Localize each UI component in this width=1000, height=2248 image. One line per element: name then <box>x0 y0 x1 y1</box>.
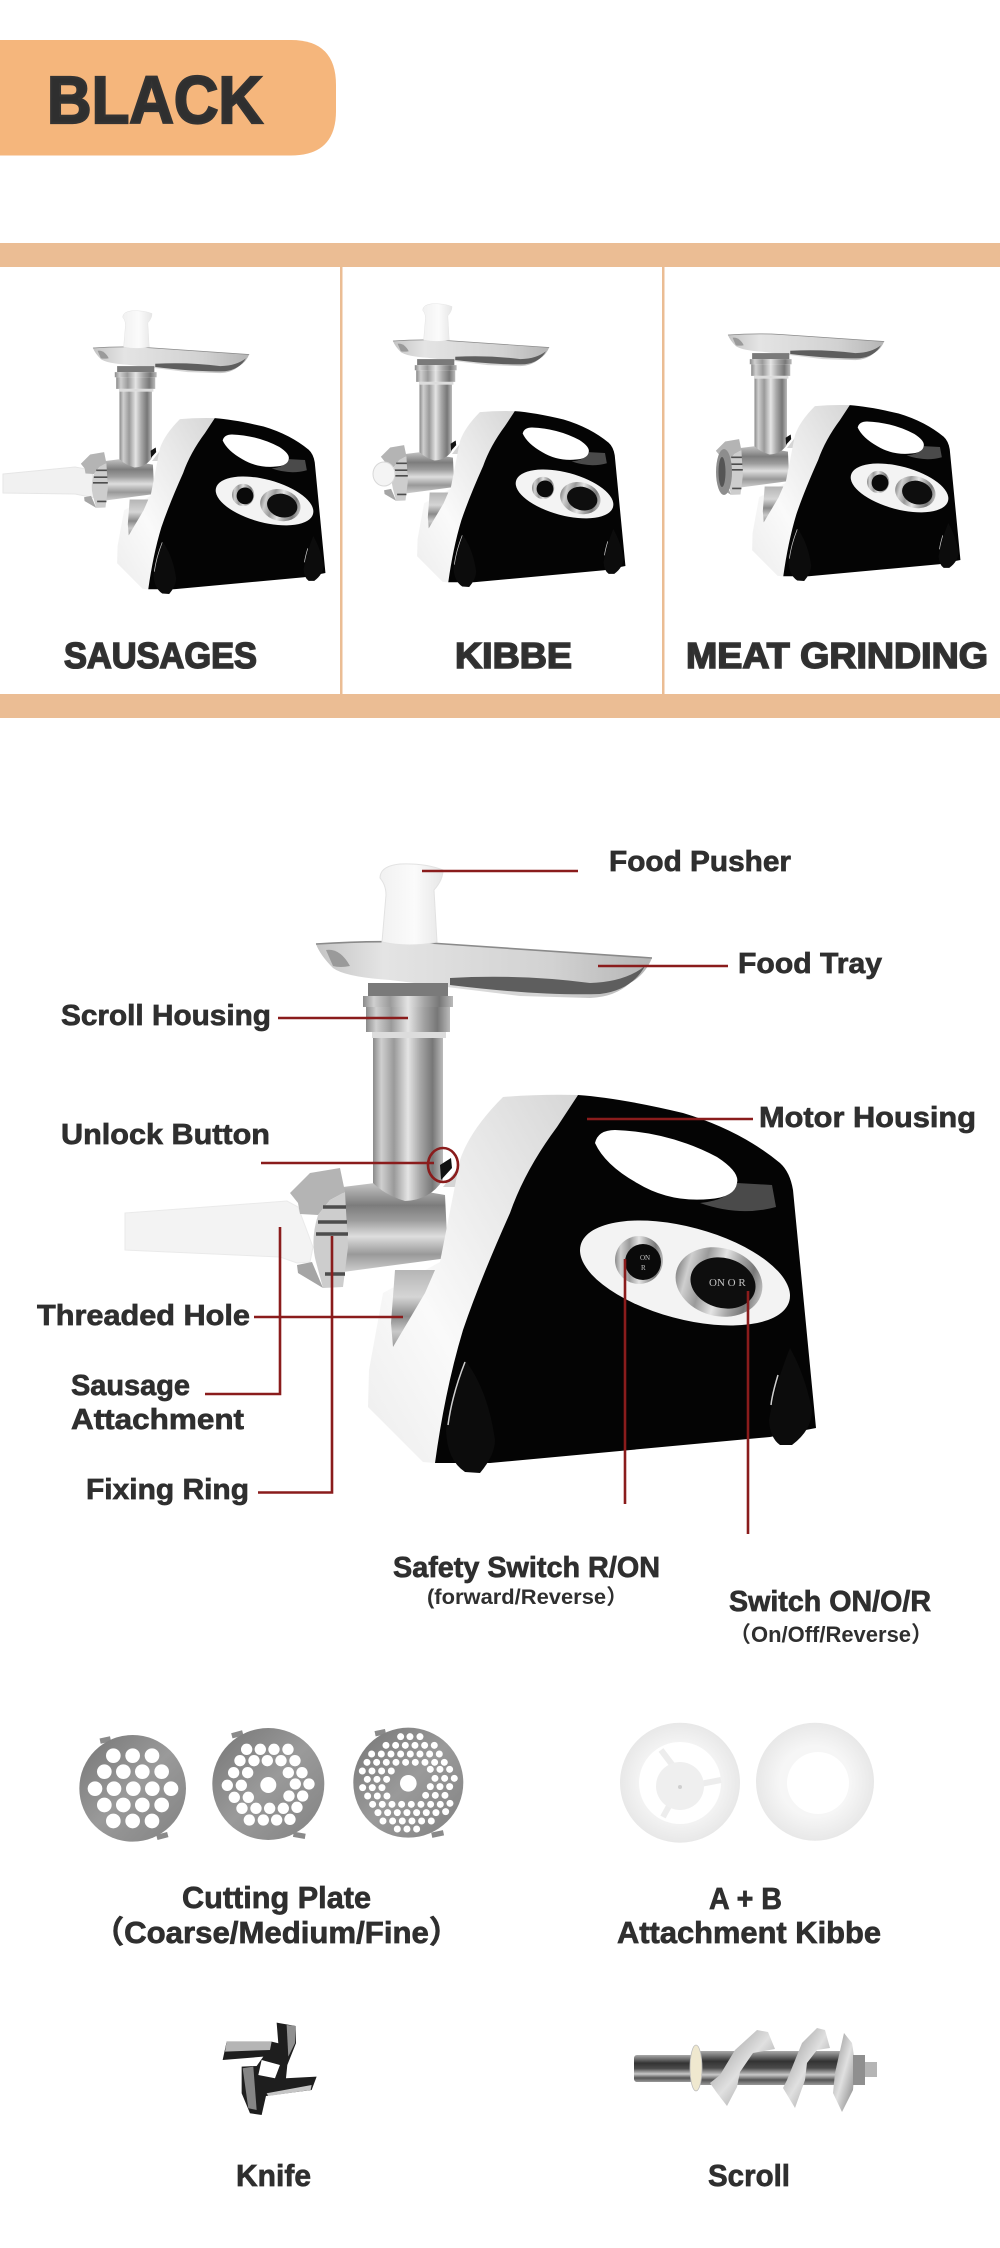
callout: fixing ring: Fixing Ring <box>86 1474 249 1506</box>
grinder body <box>290 942 816 1473</box>
switch markings: ON O R <box>709 1277 746 1289</box>
callout: threaded hole: Threaded Hole <box>37 1300 250 1332</box>
label: sausages: SAUSAGES <box>64 635 257 676</box>
callout: safety switch <box>393 1259 660 1609</box>
label: cutting plate <box>93 1880 460 1950</box>
callout: main switch <box>729 1291 933 1647</box>
sausage attachment <box>125 1201 313 1263</box>
label: cutting plate: （Coarse/Medium/Fine） <box>93 1915 460 1950</box>
callout: unlock button <box>61 1119 458 1182</box>
badge: BLACK <box>0 40 336 156</box>
callout: food pusher: Food Pusher <box>609 846 791 878</box>
icon: knife <box>223 2023 317 2115</box>
grinder with sausage attachment <box>3 311 325 594</box>
icon: attachment B <box>756 1723 874 1841</box>
panel: usage modes <box>0 243 1000 718</box>
callout: scroll housing: Scroll Housing <box>61 1000 271 1032</box>
bottom band <box>0 694 1000 718</box>
label: kibbe: KIBBE <box>455 635 572 676</box>
diagram: labelled grinder <box>37 846 976 1647</box>
switch markings: ON <box>640 1254 650 1262</box>
icon: fine cutting plate <box>353 1728 463 1838</box>
icon: coarse cutting plate <box>79 1735 186 1842</box>
label: attachment kibbe: Attachment Kibbe <box>617 1915 881 1950</box>
grinder with kibbe attachment <box>373 304 625 587</box>
label: attachment kibbe <box>617 1881 881 1950</box>
callout: sausage attachment: Attachment <box>71 1404 244 1436</box>
food pusher <box>380 864 443 945</box>
callout: unlock button: Unlock Button <box>61 1119 270 1151</box>
icon: attachment A <box>620 1723 740 1843</box>
label: attachment kibbe: A + B <box>709 1881 782 1916</box>
label: scroll: Scroll <box>708 2158 790 2193</box>
switch markings <box>640 1254 746 1289</box>
callout: food tray: Food Tray <box>738 948 882 980</box>
switch markings: R <box>641 1264 646 1272</box>
icon: scroll <box>634 2028 877 2112</box>
callout: main switch: Switch ON/O/R <box>729 1586 931 1618</box>
label: meat grinding: MEAT GRINDING <box>686 635 988 676</box>
callout: sausage attachment: Sausage <box>71 1370 190 1402</box>
label: cutting plate: Cutting Plate <box>182 1880 371 1915</box>
badge background <box>0 40 336 156</box>
callout: safety switch: (forward/Reverse） <box>427 1586 628 1609</box>
grinder with cutting plate <box>716 334 960 581</box>
callout: main switch: （On/Off/Reverse） <box>729 1622 933 1647</box>
badge title: BLACK <box>47 63 263 138</box>
callout: safety switch: Safety Switch R/ON <box>393 1552 660 1584</box>
panel: accessories <box>79 1723 881 2193</box>
callout: fixing ring <box>86 1236 332 1506</box>
icon: medium cutting plate <box>212 1728 324 1840</box>
label: knife: Knife <box>236 2158 311 2193</box>
callout: sausage attachment <box>71 1227 280 1436</box>
top band <box>0 243 1000 267</box>
callout: motor housing: Motor Housing <box>759 1102 976 1134</box>
callouts <box>37 846 976 1647</box>
